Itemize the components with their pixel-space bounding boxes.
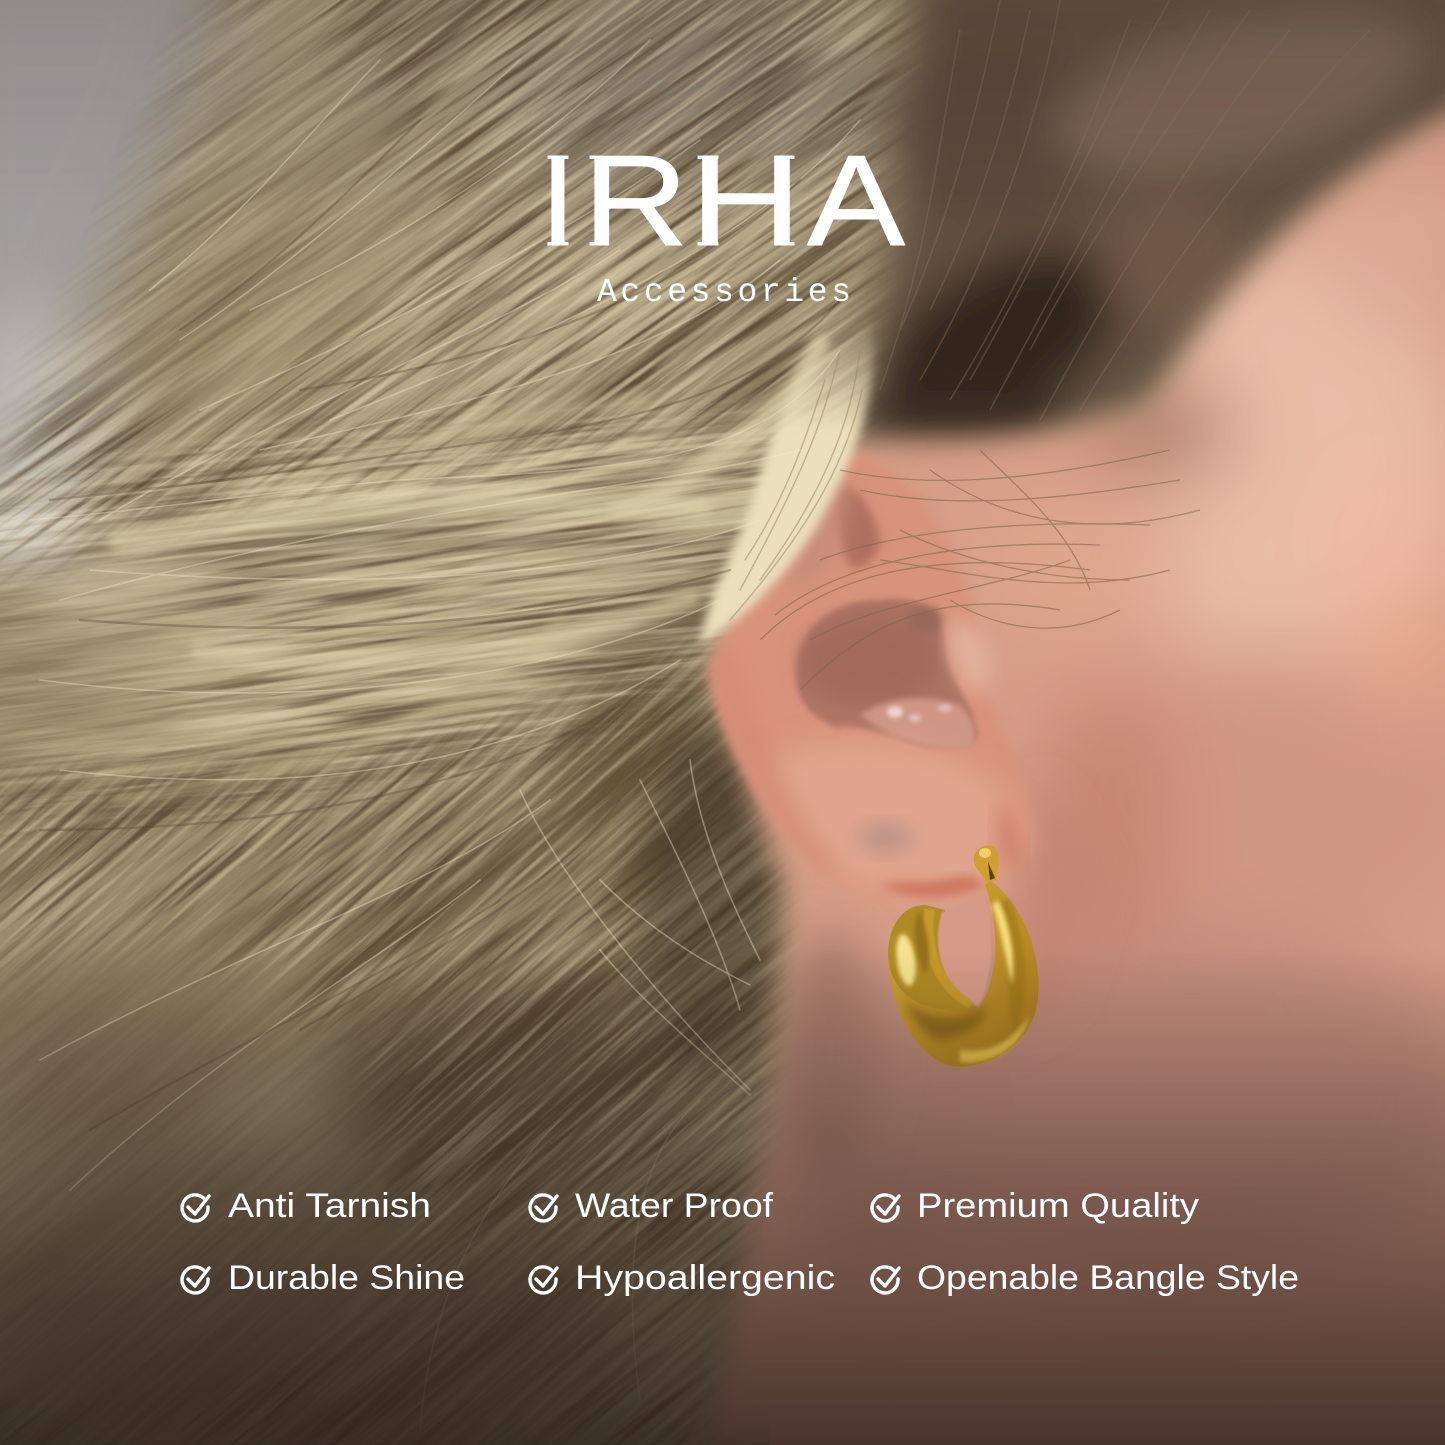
check icon bbox=[182, 1195, 209, 1221]
title: IRHA bbox=[540, 129, 905, 273]
check icon bbox=[530, 1195, 557, 1221]
feature: Openable Bangle Style: Openable Bangle Style bbox=[917, 1259, 1299, 1297]
helix fold bbox=[831, 487, 880, 568]
ear shape bbox=[710, 452, 1030, 902]
blonde hair highlights bbox=[30, 40, 874, 1430]
feature: Premium Quality: Premium Quality bbox=[917, 1187, 1199, 1225]
gold hoop earring bbox=[888, 845, 1039, 1067]
hoop front band bbox=[888, 880, 1039, 1067]
dark under-hair shadow bbox=[635, 720, 785, 1080]
hoop highlights bbox=[992, 900, 1013, 985]
hoop back band bbox=[888, 905, 985, 1055]
bottom shade bbox=[0, 950, 1445, 1445]
stray hair across the ear bbox=[760, 450, 1200, 690]
hair strand texture bbox=[0, 0, 912, 1438]
antihelix light bbox=[950, 620, 991, 693]
letter R: R bbox=[583, 129, 688, 273]
hole showing skin bbox=[938, 892, 991, 1006]
feature: Water Proof: Water Proof bbox=[575, 1187, 774, 1225]
check icon bbox=[872, 1267, 899, 1293]
letter A: A bbox=[807, 129, 905, 273]
check icon bbox=[182, 1267, 209, 1293]
feature list bbox=[182, 1187, 1299, 1297]
earring hinge bbox=[974, 845, 999, 882]
feature: Anti Tarnish: Anti Tarnish bbox=[228, 1187, 431, 1225]
ear lobe bbox=[770, 741, 1026, 899]
top shade bbox=[0, 0, 1445, 220]
ear bbox=[710, 452, 1030, 902]
fine strands bbox=[30, 40, 860, 1430]
check icon bbox=[872, 1195, 899, 1221]
letter I: I bbox=[540, 129, 576, 273]
hair tone map bbox=[0, 0, 885, 1440]
bright blonde ribbon bbox=[700, 310, 874, 645]
letter H: H bbox=[690, 129, 802, 273]
hoop shading bbox=[905, 1000, 986, 1040]
dark hair strands bbox=[880, 0, 1370, 420]
glossy ear ridge bbox=[860, 698, 975, 749]
dark hair above the skin bbox=[850, 0, 1445, 470]
subtitle: Accessories: Accessories bbox=[597, 274, 851, 311]
skin bbox=[697, 97, 1445, 1445]
check icon bbox=[530, 1267, 557, 1293]
concha hollow bbox=[796, 599, 977, 749]
feature: Hypoallergenic: Hypoallergenic bbox=[575, 1259, 835, 1297]
feature: Durable Shine: Durable Shine bbox=[228, 1259, 465, 1297]
ribbon strands bbox=[730, 350, 862, 620]
